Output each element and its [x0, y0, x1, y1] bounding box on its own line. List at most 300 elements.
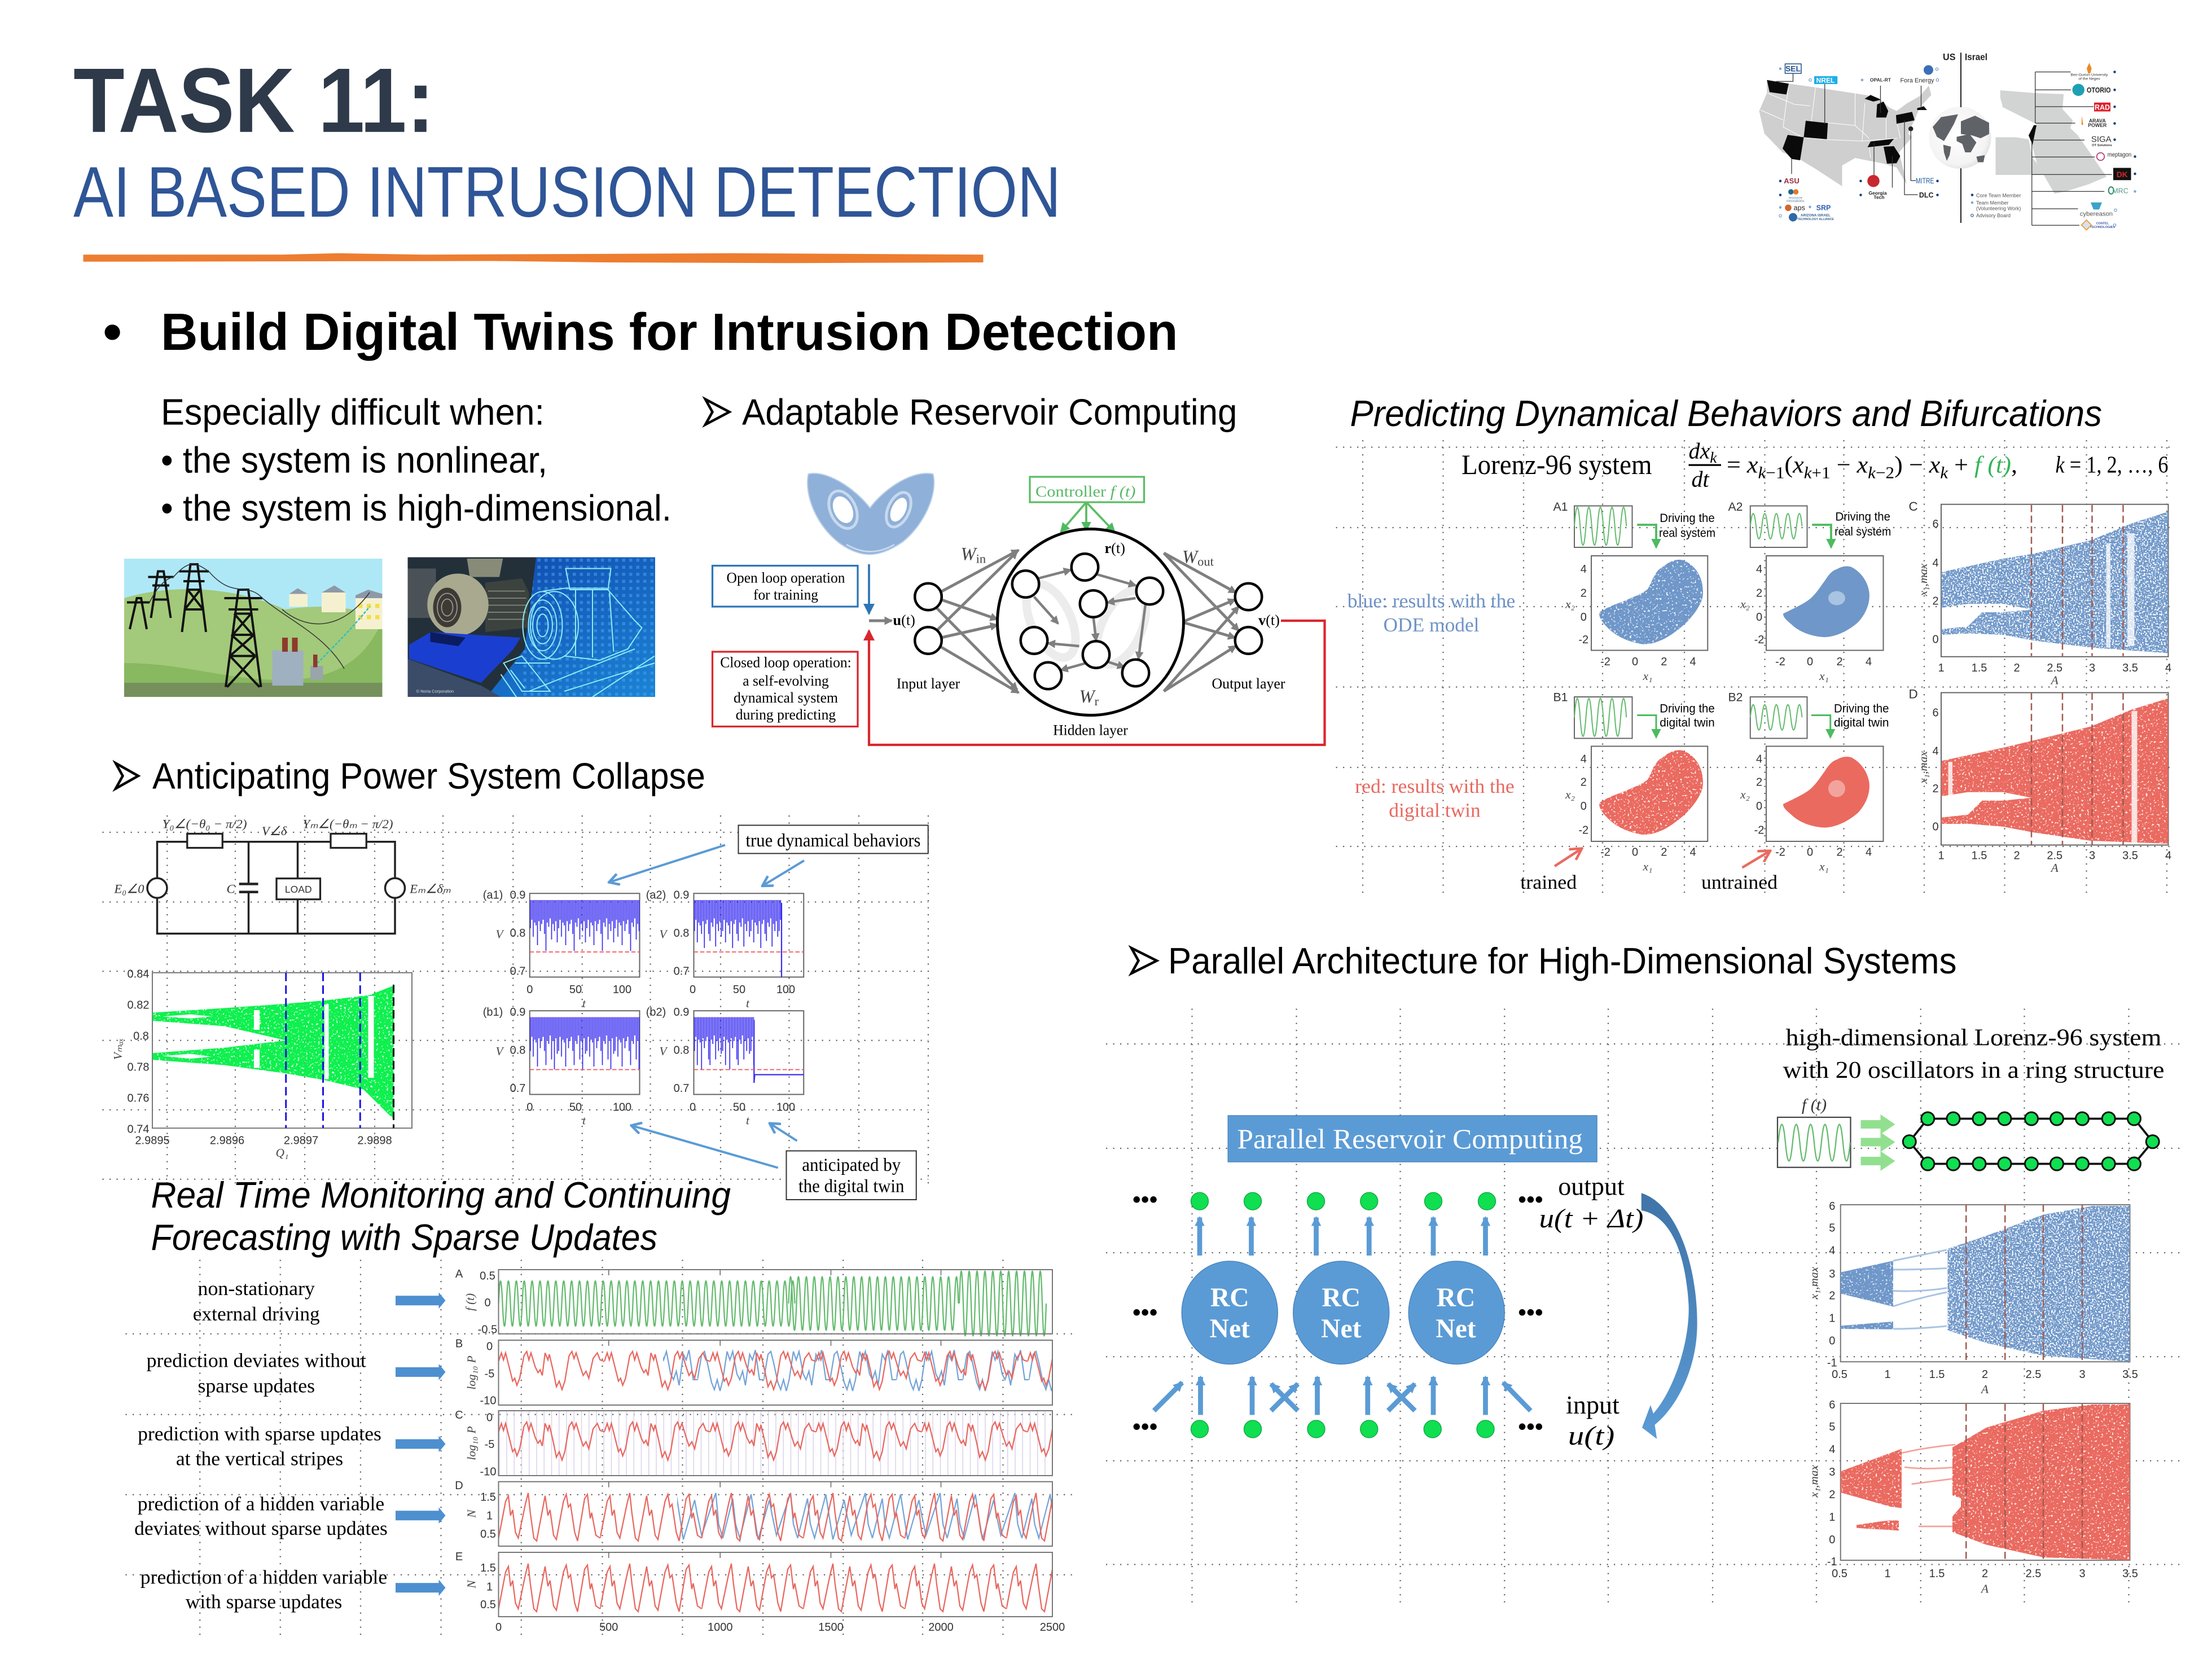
fraction: k [1710, 449, 1717, 466]
chart A: driving signal: -0.5 [478, 1324, 497, 1336]
chart E: hidden variable with updates: 0 [495, 1621, 502, 1634]
chart C: prediction with sparse updates: log₁₀ P [465, 1426, 479, 1460]
reservoir 3: RC [1437, 1283, 1475, 1313]
panel B2: forcing and attractor, digital twin: 4 [1756, 753, 1762, 765]
leader lines [1776, 72, 2112, 225]
crossing arrows [1154, 1382, 1530, 1411]
legend text: red results: digital twin [1389, 800, 1481, 822]
panel D: bifurcation diagram, digital twin: 6 [1932, 706, 1939, 719]
row captions and arrows [134, 1278, 446, 1613]
time series panel a2: 0.7 [674, 965, 689, 978]
panel D: bifurcation diagram, digital twin: 2.5 [2047, 850, 2062, 862]
high-dimensional bifurcation: blue: 2 [1982, 1368, 1988, 1381]
annotation: trained: trained [1520, 871, 1577, 893]
time series panel a1: 0.8 [510, 927, 525, 940]
chart E: hidden variable with updates: N [465, 1579, 479, 1589]
panel A2: forcing and attractor, real system: -2 [1775, 656, 1785, 668]
time series panel a1: 0.9 [510, 889, 525, 902]
partner logos: SEL [1785, 64, 1801, 73]
panel B2: forcing and attractor, digital twin: digital twin [1834, 716, 1889, 729]
chart E: hidden variable with updates: E [455, 1551, 463, 1563]
text block: why it is difficult: • the system is nonlinear, [161, 439, 547, 480]
panel A2: forcing and attractor, real system: x₂ [1740, 597, 1750, 611]
Israel regional map [1995, 90, 2106, 194]
hidden layer reservoir: W [1079, 687, 1095, 707]
circuit diagram: LOAD [285, 884, 312, 895]
time series panel a1: 100 [613, 984, 631, 996]
closed loop label: a self-evolving [743, 673, 829, 689]
input labels [1566, 1391, 1620, 1451]
high-dimensional bifurcation: blue: 0.5 [1832, 1368, 1847, 1381]
panel B1: forcing and attractor, digital twin: 4 [1581, 753, 1587, 765]
transformer [272, 650, 304, 686]
high-dimensional bifurcation: red: 3 [1829, 1466, 1835, 1478]
time series panel b2: 0.8 [674, 1044, 689, 1057]
bifurcation diagram: voltage: 0.82 [128, 999, 149, 1012]
caption E: with sparse updates [186, 1591, 342, 1613]
partner logos: of the Negev [2078, 77, 2100, 81]
callout: anticipated by the digital twin: the digital twin [798, 1176, 904, 1196]
time series panel a2: t [746, 997, 750, 1010]
main bullet heading: • [103, 302, 122, 362]
panel D: bifurcation diagram, digital twin [1908, 687, 2171, 875]
chart B: prediction without updates: B [455, 1338, 463, 1350]
chart E: hidden variable with updates: 500 [599, 1621, 618, 1634]
panel C: bifurcation diagram, real system: 0 [1932, 633, 1939, 646]
panel A1: forcing and attractor, real system: x₁ [1643, 669, 1652, 683]
partner logos: meptagon [2108, 152, 2131, 159]
time series panel b1: 0.8 [510, 1044, 525, 1057]
partner logos: TECHNOLOGY ALLIANCE [1797, 218, 1834, 221]
panel A2: forcing and attractor, real system: -2 [1754, 634, 1764, 646]
time series panel a2: 100 [776, 984, 795, 996]
callout: anticipated by the digital twin: anticipated by [802, 1155, 901, 1175]
heading: parallel architecture: Parallel Architecture for High-Dimensional Systems [1168, 940, 1957, 981]
equation body: k [1758, 464, 1766, 482]
chart B: prediction without updates: -10 [480, 1395, 496, 1407]
chart C: prediction with sparse updates: -5 [485, 1438, 494, 1451]
panel C: bifurcation diagram, real system: 6 [1932, 518, 1939, 530]
equation body: = x [1727, 451, 1758, 479]
illustration: motor digital twin [407, 558, 655, 697]
panel B1: forcing and attractor, digital twin: 2 [1661, 846, 1667, 858]
panel B2: forcing and attractor, digital twin: x₁ [1819, 860, 1829, 874]
chart D: hidden variable without updates: 1 [486, 1510, 493, 1522]
Lorenz butterfly attractor [807, 473, 934, 554]
map legend: (Volunteering Work) [1976, 206, 2021, 212]
high-dimensional bifurcation: blue: A [1980, 1382, 1989, 1396]
panel A2: forcing and attractor, real system: 0 [1756, 611, 1762, 624]
partner logos: Fora Energy [1901, 77, 1934, 84]
panel A2: forcing and attractor, real system: A2 [1728, 500, 1743, 514]
high-dimensional bifurcation: red: 6 [1829, 1399, 1835, 1411]
time series panel a1: t [582, 997, 586, 1010]
caption B [147, 1350, 366, 1397]
globe [1929, 107, 1991, 169]
output layer nodes [1235, 583, 1262, 654]
high-dimensional bifurcation: red: 5 [1829, 1421, 1835, 1433]
panel C: bifurcation diagram, real system: C [1908, 499, 1918, 514]
bifurcation diagram: voltage: 0.74 [128, 1123, 149, 1136]
time series panel b1: t [582, 1114, 586, 1127]
panel A1: forcing and attractor, real system: 2 [1581, 587, 1587, 600]
panel B2: forcing and attractor, digital twin: 2 [1756, 776, 1762, 789]
bifurcation diagram: voltage: 2.9896 [210, 1135, 244, 1147]
annotation: untrained: untrained [1701, 871, 1778, 893]
high-dimensional bifurcation: blue: 4 [1829, 1245, 1835, 1257]
controller box: Controller f (t) [1035, 482, 1135, 500]
panel B1: forcing and attractor, digital twin: Driving the [1660, 701, 1715, 715]
panel A1: forcing and attractor, real system: 4 [1689, 656, 1696, 668]
map legend [1971, 193, 2021, 218]
heading: anticipating power system collapse: Anticipating Power System Collapse [152, 756, 705, 797]
high-dimensional bifurcation: red: 4 [1829, 1443, 1835, 1456]
layer labels [897, 545, 1285, 738]
equation body: x [1856, 452, 1868, 479]
reservoir 2: Net [1321, 1314, 1362, 1344]
u(t) label: u(t) [893, 612, 915, 629]
equation index: k = 1, 2, …, 6 [2055, 452, 2168, 479]
divider and country labels: US [1943, 52, 1956, 62]
caption C: prediction with sparse updates [138, 1423, 381, 1445]
fraction: dt [1692, 467, 1710, 492]
partner logos: SRP [1816, 204, 1831, 212]
equation body: k [1804, 464, 1812, 482]
panel C: bifurcation diagram, real system: 1 [1938, 662, 1945, 674]
closed loop label: Closed loop operation: [720, 655, 852, 671]
caption C [138, 1423, 381, 1469]
high-dimensional bifurcation: red: 3 [2079, 1568, 2086, 1580]
text block: ring system description: high-dimensional Lorenz-96 system [1786, 1025, 2162, 1051]
time series panel b1: 50 [569, 1101, 582, 1114]
caption A: non-stationary [198, 1278, 315, 1300]
partner logos: OPAL-RT [1870, 77, 1891, 83]
partner logos: ARAVA [2089, 118, 2106, 124]
equation body: +1 [1812, 464, 1831, 482]
partner logos: Georgia [1868, 190, 1887, 196]
layer labels: Hidden layer [1053, 722, 1128, 739]
text block: why it is difficult: • the system is high-dimensional. [161, 487, 672, 528]
time series panel a1: 0 [526, 984, 533, 996]
ellipsis markers: ••• [1518, 1300, 1543, 1326]
time series panel b1: 0.9 [510, 1006, 525, 1019]
map legend: Advisory Board [1976, 213, 2011, 218]
bifurcation diagram: voltage: 0.78 [128, 1061, 149, 1074]
high-dimensional bifurcation: blue: 5 [1829, 1222, 1835, 1235]
high-dimensional bifurcation: red: 1.5 [1929, 1568, 1945, 1580]
partner logos: Ben-Gurion University [2070, 73, 2108, 77]
high-dimensional bifurcation: blue: 2 [1829, 1290, 1835, 1302]
panel D: bifurcation diagram, digital twin: 3 [2089, 850, 2095, 862]
panel D: bifurcation diagram, digital twin: 3.5 [2122, 850, 2138, 862]
connections to and from hidden layer [937, 550, 1239, 693]
time series panel b1: V [496, 1044, 505, 1058]
panel B2: forcing and attractor, digital twin: Driving the [1834, 701, 1889, 715]
annotation: trained [1520, 849, 1581, 893]
legend text: blue results [1348, 590, 1515, 636]
panel B2: forcing and attractor, digital twin: 2 [1836, 846, 1843, 858]
ellipsis markers: ••• [1133, 1187, 1158, 1213]
input nodes [1191, 1420, 1494, 1438]
panel B2: forcing and attractor, digital twin [1728, 691, 1889, 874]
chart C: prediction with sparse updates [455, 1409, 1052, 1478]
layer labels: in [976, 552, 986, 565]
block arrows [396, 1292, 446, 1596]
caption E: prediction of a hidden variable [141, 1566, 387, 1588]
equation body: k [1868, 464, 1876, 482]
chart B: prediction without updates [455, 1337, 1052, 1407]
up arrows above reservoirs [1200, 1218, 1485, 1256]
high-dimensional bifurcation: red: x₁,max [1807, 1465, 1821, 1498]
time series panel a2: 0.8 [674, 927, 689, 940]
panel B1: forcing and attractor, digital twin: -2 [1578, 824, 1588, 837]
time series panel b2: t [746, 1114, 750, 1127]
panel A1: forcing and attractor, real system: x₂ [1565, 597, 1575, 611]
equation body: −1 [1766, 464, 1784, 482]
high-dimensional bifurcation: blue: 3 [1829, 1268, 1835, 1280]
ellipsis markers: ••• [1133, 1300, 1158, 1326]
map legend: Team Member [1976, 200, 2009, 206]
equation body: f (t), [1974, 451, 2017, 479]
partner logos: SIGA [2091, 134, 2112, 144]
heading: real time monitoring [151, 1174, 731, 1258]
callout: true dynamical behaviors: true dynamical behaviors [746, 831, 921, 851]
illustration: motor digital twin: © Noria Corporation [416, 689, 454, 694]
panel D: bifurcation diagram, digital twin: 1 [1938, 850, 1945, 862]
time series panel b2: (b2) [646, 1006, 666, 1019]
layer labels: v(t) [1258, 612, 1280, 629]
title line: subject: AI BASED INTRUSION DETECTION [73, 152, 1061, 232]
partner logos [1779, 63, 2136, 230]
circuit diagram [114, 817, 451, 933]
bifurcation diagram: voltage: Q₁ [276, 1146, 288, 1160]
partner logos: OTORIO [2087, 86, 2111, 94]
time series panel b2 [646, 1006, 804, 1127]
high-dimensional bifurcation: blue: 2.5 [2026, 1368, 2041, 1381]
panel A1: forcing and attractor, real system: -2 [1600, 656, 1610, 668]
panel C: bifurcation diagram, real system: 4 [1932, 557, 1939, 569]
heading: predicting dynamical behaviors: Predicting Dynamical Behaviors and Bifurcations [1350, 393, 2102, 434]
panel B2: forcing and attractor, digital twin: 0 [1756, 800, 1762, 813]
high-dimensional bifurcation: blue [1807, 1200, 2138, 1396]
high-dimensional bifurcation: blue: x₁,max [1807, 1266, 1821, 1300]
circuit diagram: E₀∠0 [113, 881, 144, 896]
panel A1: forcing and attractor, real system: 0 [1581, 611, 1587, 624]
text block: why it is difficult [161, 392, 672, 528]
partner logos: ASU [1784, 177, 1800, 185]
equation body: x [1929, 452, 1940, 479]
chart D: hidden variable without updates: N [465, 1509, 479, 1518]
caption A: external driving [193, 1303, 320, 1325]
reservoir 1: RC [1210, 1283, 1249, 1313]
closed loop label [712, 652, 858, 727]
panel D: bifurcation diagram, digital twin: A [2050, 861, 2059, 875]
caption D [134, 1493, 388, 1539]
chart A: driving signal [455, 1268, 1052, 1336]
panel D: bifurcation diagram, digital twin: 4 [1932, 745, 1939, 758]
panel B1: forcing and attractor, digital twin: 2 [1581, 776, 1587, 789]
panel D: bifurcation diagram, digital twin: D [1908, 687, 1918, 701]
high-dimensional bifurcation: red [1807, 1399, 2138, 1596]
caption D: prediction of a hidden variable [138, 1493, 384, 1515]
panel A2: forcing and attractor, real system: 4 [1756, 563, 1762, 576]
equation body: ) − [1894, 452, 1929, 479]
panel A1: forcing and attractor, real system: 4 [1581, 563, 1587, 576]
bifurcation diagram: voltage: 0.84 [128, 968, 149, 981]
panel C: bifurcation diagram, real system: 2 [2013, 662, 2020, 674]
panel A1: forcing and attractor, real system [1553, 500, 1715, 683]
output labels: output [1558, 1173, 1625, 1201]
equation body: ( [1784, 452, 1793, 479]
high-dimensional bifurcation: red: 0 [1829, 1534, 1835, 1546]
high-dimensional bifurcation: blue: 1 [1829, 1313, 1835, 1325]
bifurcation diagram: voltage: Vₘₐₓ [111, 1038, 125, 1060]
high-dimensional bifurcation: blue: 1.5 [1929, 1368, 1945, 1381]
forcing signal box: f (t) [1802, 1096, 1827, 1114]
equation body: x [1792, 452, 1804, 479]
partner logos: POWER [2088, 122, 2107, 128]
panel C: bifurcation diagram, real system: A [2050, 673, 2059, 687]
input labels: u(t) [1568, 1421, 1614, 1451]
high-dimensional bifurcation: blue: 0 [1829, 1335, 1835, 1348]
chart C: prediction with sparse updates: C [455, 1409, 463, 1421]
legend text: red results: red: results with the [1355, 775, 1515, 797]
high-dimensional bifurcation: blue: 1 [1884, 1368, 1891, 1381]
panel B2: forcing and attractor, digital twin: B2 [1728, 690, 1743, 704]
high-dimensional bifurcation: red: 2.5 [2026, 1568, 2041, 1580]
title [73, 50, 1061, 263]
open loop label: for training [753, 587, 818, 603]
chart A: driving signal: A [455, 1268, 463, 1280]
layer labels: W [1182, 547, 1197, 568]
partner logos: NREL [1816, 76, 1834, 84]
panel B1: forcing and attractor, digital twin [1553, 691, 1715, 874]
caption C: at the vertical stripes [176, 1447, 343, 1469]
chart E: hidden variable with updates: 1000 [708, 1621, 733, 1634]
partner logos: DK [2117, 170, 2128, 179]
caption D: deviates without sparse updates [134, 1517, 388, 1539]
panel C: bifurcation diagram, real system: x₁,max [1916, 563, 1930, 596]
time series panel b1: (b1) [483, 1006, 503, 1019]
heading: real time monitoring: Real Time Monitoring and Continuing [151, 1174, 731, 1215]
layer labels: Output layer [1212, 675, 1285, 692]
Lorenz-96 equation: Lorenz-96 system [1462, 449, 1652, 480]
text block: ring system description: with 20 oscillators in a ring structure [1783, 1057, 2165, 1083]
main bullet heading: Build Digital Twins for Intrusion Detection [161, 302, 1178, 361]
forcing signal box [1778, 1096, 1895, 1171]
panel A1: forcing and attractor, real system: -2 [1578, 634, 1588, 646]
time series panel b2: 0 [690, 1101, 696, 1114]
fraction: dx [1688, 438, 1710, 464]
panel C: bifurcation diagram, real system: 2.5 [2047, 662, 2062, 674]
time series panel b1 [483, 1006, 640, 1127]
hidden layer reservoir: r [1095, 694, 1099, 708]
layer labels: out [1197, 554, 1214, 569]
time series panel a2: 50 [733, 984, 745, 996]
bifurcation diagram: voltage: 0.8 [133, 1030, 149, 1043]
panel B1: forcing and attractor, digital twin: digital twin [1660, 716, 1715, 729]
panel D: bifurcation diagram, digital twin: 2 [2013, 850, 2020, 862]
partner logos: RAD [2095, 104, 2110, 112]
panel B2: forcing and attractor, digital twin: x₂ [1740, 788, 1750, 801]
equation body: k [1940, 464, 1948, 482]
chart E: hidden variable with updates: 1500 [818, 1621, 844, 1634]
panel A2: forcing and attractor, real system: 0 [1807, 656, 1813, 668]
orange brush underline [84, 253, 983, 263]
pylons [127, 564, 262, 687]
output labels: u(t + Δt) [1539, 1204, 1643, 1234]
reservoir 2: RC [1322, 1283, 1360, 1313]
partner logos: MITRE [1916, 177, 1934, 185]
annotation: untrained [1701, 852, 1778, 893]
panel C: bifurcation diagram, real system: 4 [2165, 662, 2171, 674]
caption B: prediction deviates without [147, 1350, 366, 1372]
partner logos: aps [1794, 204, 1805, 212]
partner logos: OT Solutions [2092, 144, 2112, 147]
output labels [1539, 1173, 1643, 1234]
bifurcation diagram: voltage: 2.9897 [284, 1135, 318, 1147]
layer labels: Input layer [897, 675, 960, 692]
panel A2: forcing and attractor, real system: 2 [1756, 587, 1762, 600]
text block: ring system description [1783, 1025, 2165, 1083]
circuit diagram: C [226, 881, 235, 896]
chart E: hidden variable with updates: 2500 [1040, 1621, 1065, 1634]
closed loop label: during predicting [736, 706, 836, 723]
high-dimensional bifurcation: blue: 3.5 [2122, 1368, 2138, 1381]
legend text: blue results: ODE model [1384, 614, 1480, 636]
panel D: bifurcation diagram, digital twin: 1.5 [1972, 850, 1987, 862]
panel C: bifurcation diagram, real system: 1.5 [1972, 662, 1987, 674]
Lorenz-96 equation [1462, 438, 2168, 492]
high-dimensional bifurcation: red: 3.5 [2122, 1568, 2138, 1580]
partner logos: MRC [2112, 187, 2128, 195]
open loop label: Open loop operation [727, 570, 845, 586]
partner logos: Tech [1873, 195, 1885, 200]
legend text: red results [1355, 775, 1515, 822]
reservoir 3: Net [1436, 1314, 1476, 1344]
ellipsis markers [1133, 1187, 1543, 1440]
caption B: sparse updates [198, 1375, 315, 1397]
panel B2: forcing and attractor, digital twin: 4 [1866, 846, 1872, 858]
bifurcation diagram: voltage [111, 968, 412, 1160]
high-dimensional bifurcation: red: 1 [1829, 1511, 1835, 1524]
partner logos: DLC [1919, 191, 1934, 199]
caption E [141, 1566, 387, 1613]
time series panel a1: 50 [569, 984, 582, 996]
high-dimensional bifurcation: red: A [1980, 1582, 1989, 1596]
time series panel a2 [646, 889, 804, 1010]
panel B1: forcing and attractor, digital twin: B1 [1553, 690, 1568, 704]
caption A [193, 1278, 320, 1325]
panel A1: forcing and attractor, real system: Driving the [1660, 511, 1715, 525]
partner logos: TECHNOLOGIES [2090, 226, 2115, 229]
chart A: driving signal: 0.5 [480, 1270, 495, 1283]
ellipsis markers: ••• [1518, 1414, 1543, 1441]
circuit diagram: Eₘ∠δₘ [409, 881, 451, 896]
high-dimensional bifurcation: blue: 3 [2079, 1368, 2086, 1381]
panel B1: forcing and attractor, digital twin: x₁ [1643, 860, 1652, 874]
high-dimensional bifurcation: blue: 6 [1829, 1200, 1835, 1213]
time series panel b2: V [660, 1044, 669, 1058]
hidden layer reservoir: r(t) [1105, 540, 1125, 556]
time series panel a1: V [496, 928, 505, 941]
equation body: − [1831, 452, 1857, 479]
panel A2: forcing and attractor, real system: 4 [1866, 656, 1872, 668]
US map [1759, 80, 1931, 186]
partner logos: ARIZONA ISRAEL [1801, 214, 1831, 218]
panel A2: forcing and attractor, real system: real system [1834, 525, 1891, 538]
time series panel b2: 0.9 [674, 1006, 689, 1019]
